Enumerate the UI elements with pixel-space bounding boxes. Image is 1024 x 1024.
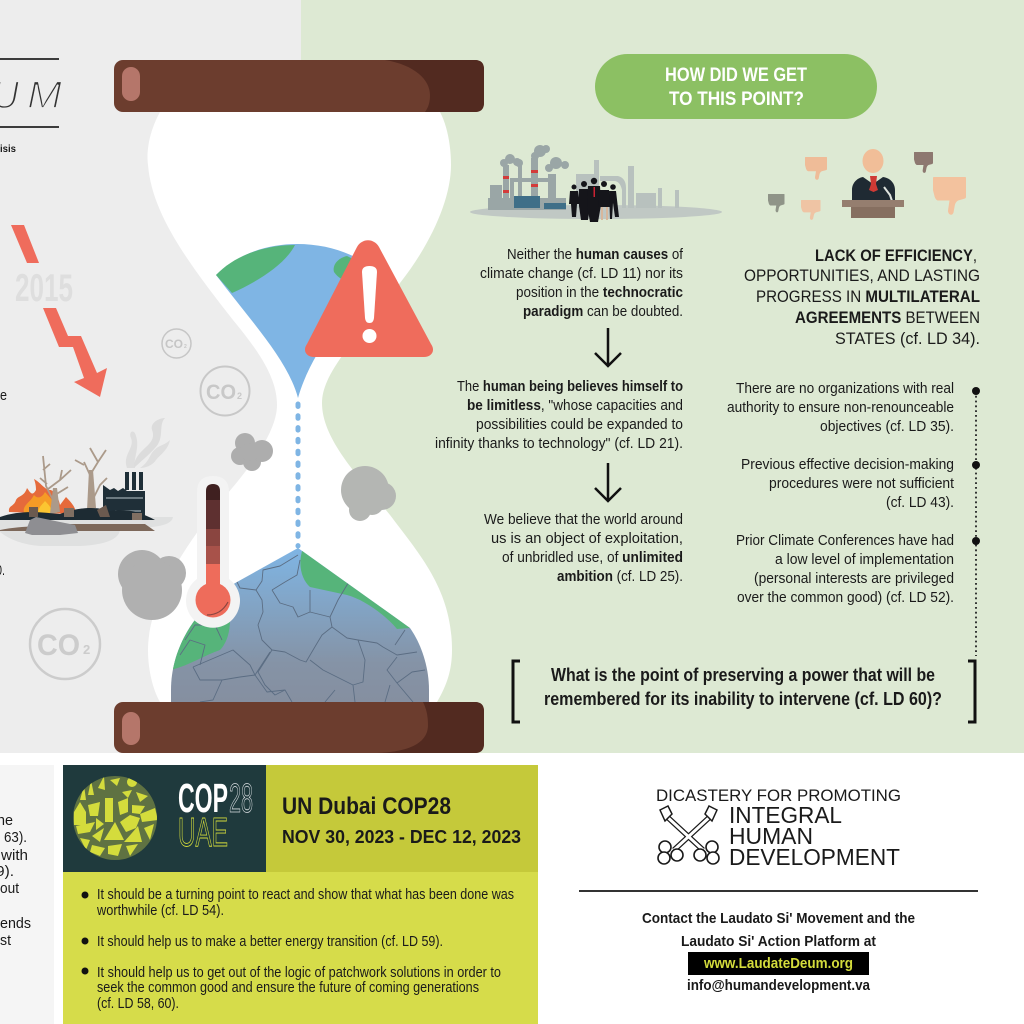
top globe sand — [216, 244, 380, 398]
arrow: red falling zigzag with year — [11, 225, 107, 397]
text block: human causes: paradigm can be doubted. — [523, 303, 683, 320]
logo: COP28 UAE wordmark — [178, 775, 253, 855]
text block: exploitation: We believe that the world around — [484, 511, 683, 528]
panel: grey left background — [0, 0, 301, 753]
panel: green right background — [301, 0, 1024, 753]
heading pill: how did we get to this point: HOW DID WE GET — [665, 65, 807, 86]
logo: Dicastery wordmark: INTEGRAL — [729, 802, 842, 828]
title: cropped Laudate Deum heading: isis — [0, 144, 16, 155]
heading pill: how did we get to this point — [595, 54, 877, 119]
icon: small CO2 badge — [162, 329, 191, 358]
logo: Dicastery wordmark: DEVELOPMENT — [729, 844, 900, 870]
icon: large CO2 badge: 2 — [83, 642, 90, 657]
icon: medium CO2 badge: CO — [206, 381, 236, 404]
illustration: speaker at podium with thumbs-down — [768, 149, 966, 220]
logo: Dicastery wordmark: HUMAN — [729, 823, 813, 849]
hourglass bottom cap — [114, 702, 484, 753]
text block: decision-making: Previous effective decision-making — [741, 456, 954, 473]
heading: UN Dubai COP28 dates: UN Dubai COP28 — [282, 793, 451, 820]
text block: exploitation: of unbridled use, of unlimited — [502, 549, 683, 566]
text block: no organizations: There are no organizations with real — [736, 380, 954, 397]
text block: contact: www.LaudateDeum.org — [703, 955, 853, 972]
callout: question in brackets: What is the point of preserving a power that will be — [551, 665, 935, 685]
logo: COP28 UAE wordmark: COP — [178, 775, 228, 821]
text fragment: cropped left column line: e — [0, 387, 7, 404]
list: COP28 expectations: seek the common good and ensure the future of coming generations — [97, 979, 479, 996]
list: COP28 expectations: It should help us to make a better energy transition (cf. LD 59). — [97, 933, 443, 950]
icon: small CO2 badge: 2 — [184, 344, 187, 350]
text block: limitless: possibilities could be expanded to — [476, 416, 683, 433]
icon: large CO2 badge: CO — [37, 629, 80, 662]
divider line — [579, 890, 978, 892]
text block: exploitation — [484, 511, 683, 585]
text block: contact — [642, 910, 915, 994]
text block: no organizations: objectives (cf. LD 35). — [820, 418, 954, 435]
icon: medium CO2 badge: 2 — [237, 391, 242, 401]
list: COP28 expectations: (cf. LD 58, 60). — [97, 995, 179, 1012]
text block: prior climate conferences: Prior Climate Conferences have had — [736, 532, 954, 549]
panel: COP28 — [63, 765, 538, 1024]
list: COP28 expectations: worthwhile (cf. LD 54). — [96, 902, 224, 919]
text block: no organizations — [727, 380, 954, 435]
text block: no organizations: authority to ensure non-renounceable — [727, 399, 954, 416]
text block: lack of efficiency heading: AGREEMENTS BETWEEN — [795, 308, 980, 327]
text block: limitless — [435, 378, 683, 452]
panel: cropped footer left: out — [0, 880, 20, 897]
dotted falling sand stream — [296, 404, 300, 546]
icon: small grey smoke cloud — [231, 433, 273, 471]
text block: limitless: The human being believes himself to — [457, 378, 683, 395]
timeline: dotted vertical with markers — [972, 387, 980, 656]
text block: decision-making: (cf. LD 43). — [886, 494, 954, 511]
panel: cropped footer left — [0, 765, 54, 1024]
icon: large CO2 badge — [30, 609, 100, 679]
panel: cropped footer left: st — [0, 932, 12, 949]
icon: burnt land, trees and factory — [0, 418, 173, 546]
hourglass: white glass silhouette — [148, 112, 452, 702]
icon: thermometer — [186, 476, 240, 628]
text block: exploitation: us is an object of exploitation, — [491, 530, 683, 547]
arrow: down one — [595, 328, 621, 366]
heading pill: how did we get to this point: TO THIS POINT? — [669, 89, 804, 110]
icon: medium CO2 badge — [200, 366, 250, 416]
illustration: refinery with business people — [470, 145, 722, 222]
arrow: down two — [595, 463, 621, 501]
text block: prior climate conferences: (personal interests are privileged — [754, 570, 954, 587]
callout: question in brackets: remembered for its inability to intervene (cf. LD 60)? — [544, 689, 942, 709]
callout: question in brackets — [513, 661, 975, 722]
panel: cropped footer left: ends — [0, 915, 31, 932]
icon: COP28 emblem — [73, 776, 158, 860]
text block: human causes: climate change (cf. LD 11) nor its — [480, 265, 683, 282]
logo: Dicastery wordmark — [656, 786, 901, 870]
bottom cracked globe — [171, 548, 429, 702]
text block: prior climate conferences: over the common good) (cf. LD 52). — [737, 589, 954, 606]
arrow: red falling zigzag with year: 2015 — [15, 267, 73, 310]
text block: decision-making: procedures were not sufficient — [769, 475, 955, 492]
icon: large grey smoke cloud — [118, 550, 186, 620]
text block: lack of efficiency heading: LACK OF EFFICIENCY, — [815, 246, 977, 265]
heading: UN Dubai COP28 dates — [282, 793, 521, 847]
text block: contact: Laudato Si' Action Platform at — [681, 933, 876, 950]
title: cropped Laudate Deum heading — [0, 58, 63, 155]
icon: small CO2 badge: CO — [165, 337, 183, 351]
icon: warning triangle — [305, 240, 433, 357]
logo: Dicastery wordmark: DICASTERY FOR PROMOTING — [656, 786, 901, 805]
text block: lack of efficiency heading — [744, 246, 980, 348]
text block: prior climate conferences: a low level of implementation — [775, 551, 954, 568]
list: COP28 expectations — [82, 886, 514, 1012]
text block: exploitation: ambition (cf. LD 25). — [557, 568, 683, 585]
text block: human causes: Neither the human causes of — [507, 246, 684, 263]
text block: human causes: position in the technocratic — [516, 284, 683, 301]
list: COP28 expectations: It should be a turning point to react and show that what has been done was — [97, 886, 514, 903]
list: COP28 expectations: It should help us to get out of the logic of patchwork solutions in order to — [97, 964, 501, 981]
heading: UN Dubai COP28 dates: NOV 30, 2023 - DEC 12, 2023 — [282, 827, 521, 847]
logo: COP28 UAE wordmark: UAE — [178, 809, 228, 855]
text block: lack of efficiency heading: PROGRESS IN MULTILATERAL — [756, 287, 980, 306]
title: cropped Laudate Deum heading: M — [27, 74, 63, 117]
text block: prior climate conferences — [736, 532, 954, 606]
hourglass top cap — [114, 60, 484, 112]
text block: lack of efficiency heading: OPPORTUNITIES, AND LASTING — [744, 266, 980, 285]
text block: contact: Contact the Laudato Si' Movement and the — [642, 910, 915, 927]
text block: lack of efficiency heading: STATES (cf. LD 34). — [835, 329, 980, 348]
icon: right grey smoke cloud — [341, 466, 396, 521]
text block: limitless: be limitless, "whose capacities and — [467, 397, 683, 414]
text block: contact: info@humandevelopment.va — [687, 977, 871, 994]
text block: decision-making — [741, 456, 955, 511]
icon: crossed keys — [658, 806, 719, 864]
text block: limitless: infinity thanks to technology" (cf. LD 21). — [435, 435, 683, 452]
panel: cropped footer left: 63). — [4, 829, 27, 846]
logo: COP28 UAE wordmark: 28 — [229, 775, 253, 821]
text block: human causes — [480, 246, 684, 320]
panel: cropped footer left: with — [0, 847, 28, 864]
panel: white footer background — [0, 753, 1024, 1024]
